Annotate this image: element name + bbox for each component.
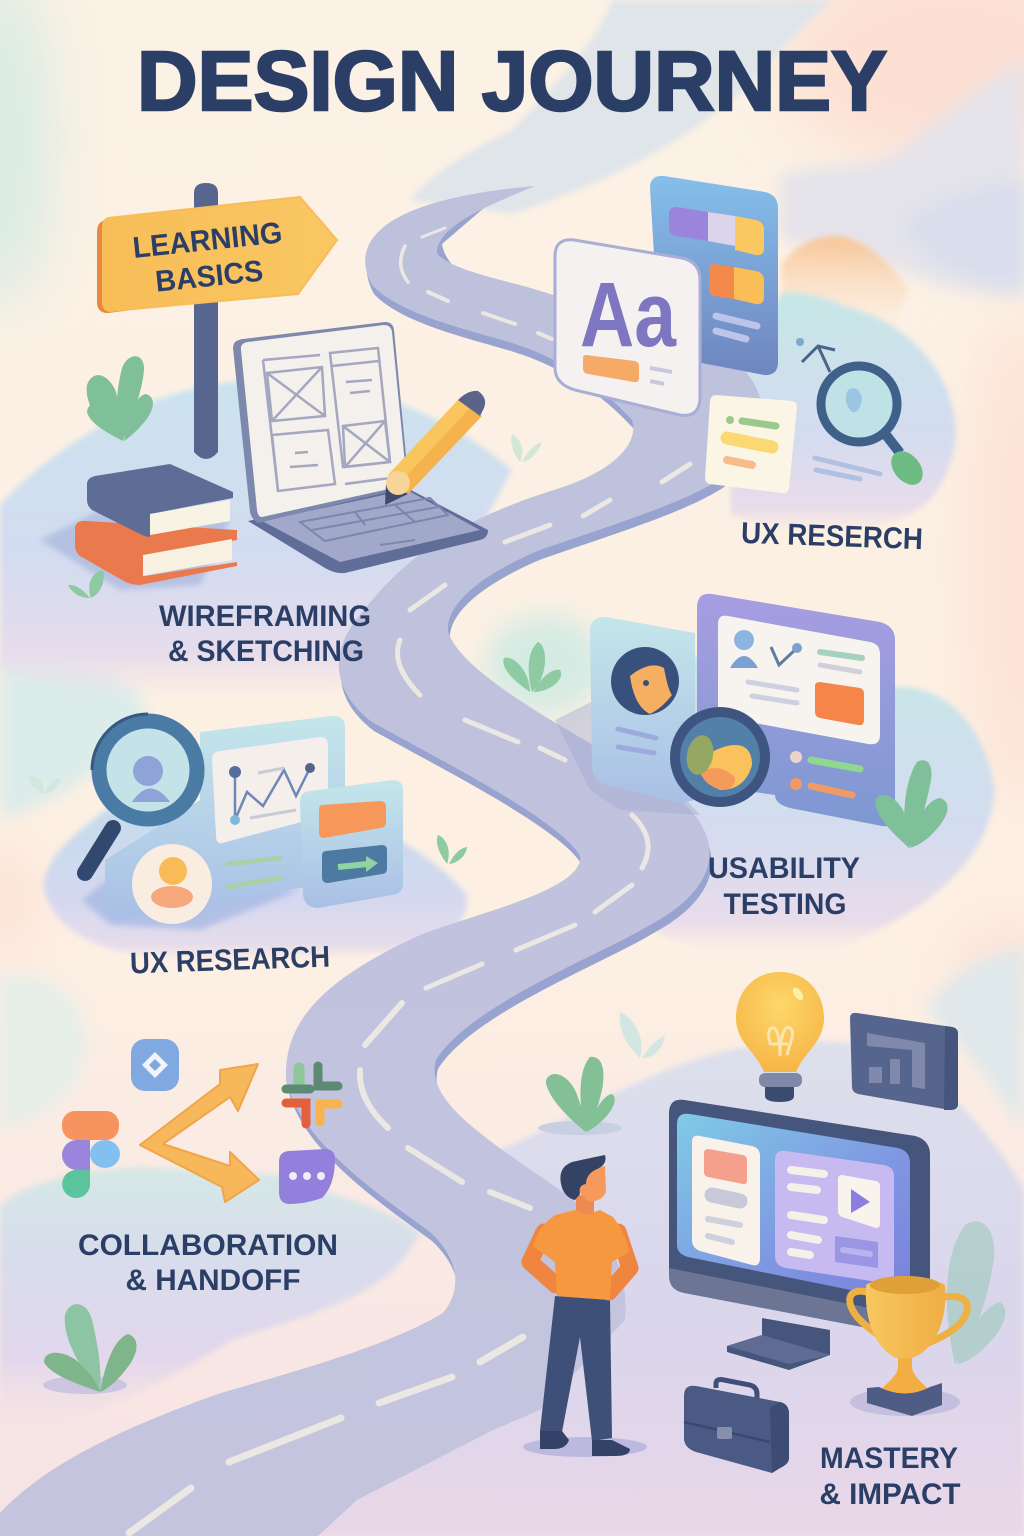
torso bbox=[533, 1210, 629, 1300]
persona avatar bbox=[611, 647, 679, 715]
sign label bbox=[131, 216, 288, 301]
UI card: typography bbox=[555, 240, 700, 415]
slack logo bbox=[286, 1066, 338, 1124]
ux research panels bbox=[82, 714, 403, 930]
label: collaboration and handoff bbox=[78, 1229, 338, 1297]
label: wireframing and sketching bbox=[159, 600, 371, 668]
label: mastery and impact: MASTERY bbox=[820, 1442, 958, 1475]
icon: faint sprout bbox=[620, 1012, 665, 1058]
icon: tiny sprout bbox=[68, 570, 104, 598]
hill: ux research bbox=[43, 800, 467, 961]
label: collaboration and handoff: & HANDOFF bbox=[126, 1264, 300, 1297]
shoes bbox=[540, 1431, 569, 1449]
label: collaboration and handoff: COLLABORATION bbox=[78, 1229, 338, 1262]
faint plant behind monitor bbox=[947, 1221, 1005, 1364]
label: usability testing bbox=[708, 852, 860, 921]
hill: bottom-left bbox=[0, 1167, 421, 1440]
frame bbox=[669, 1100, 930, 1340]
label: usability testing: USABILITY bbox=[708, 852, 860, 885]
diamond app icon bbox=[131, 1039, 179, 1091]
sign board edge bbox=[98, 198, 335, 312]
panel shadow bbox=[82, 880, 300, 930]
books shadow bbox=[40, 500, 230, 590]
label: mastery and impact bbox=[820, 1442, 960, 1511]
icon: magnifier bbox=[796, 338, 929, 491]
chart card bbox=[212, 737, 328, 843]
icon: plant by person bbox=[538, 1057, 622, 1135]
label: wireframing and sketching: & SKETCHING bbox=[168, 635, 364, 668]
neck and face bbox=[576, 1195, 594, 1215]
icon: plant right of usability bbox=[876, 760, 948, 848]
screen bbox=[677, 1114, 910, 1302]
signpost: learning basics bbox=[98, 183, 337, 459]
persona card bbox=[590, 617, 695, 803]
hair bbox=[560, 1155, 606, 1200]
label: ux reserch: UX RESERCH bbox=[740, 517, 924, 556]
ground shadow bbox=[523, 1437, 647, 1457]
status rows bbox=[790, 751, 802, 763]
left document bbox=[692, 1136, 760, 1265]
keyboard lines bbox=[300, 498, 448, 545]
road centre dashes bbox=[129, 228, 690, 1533]
icon: laptop with wireframe bbox=[233, 322, 488, 573]
hill: left teal mist bbox=[0, 655, 148, 820]
icon: trophy bbox=[850, 1276, 967, 1416]
hill: lower left teal mist bbox=[0, 974, 86, 1130]
sign label: BASICS bbox=[154, 255, 265, 299]
sign label: LEARNING bbox=[131, 216, 284, 265]
icon: analytics box bbox=[850, 1013, 958, 1110]
winding road bbox=[0, 186, 764, 1536]
icon: plant by sign bbox=[87, 356, 153, 441]
usability testing panels bbox=[555, 594, 895, 826]
monitor bbox=[669, 1100, 930, 1370]
corner mist top right of mastery bbox=[925, 945, 1024, 1130]
trophy cup bbox=[866, 1278, 945, 1358]
hill: research sun bbox=[782, 236, 909, 335]
laptop lid bbox=[233, 322, 409, 523]
icon: plant bottom left bbox=[43, 1304, 136, 1394]
share arrows bbox=[140, 1064, 259, 1202]
bottom orange book bbox=[75, 521, 237, 585]
icon: faint plant near road bbox=[511, 434, 542, 462]
pencil bbox=[388, 400, 482, 494]
collaboration icons bbox=[62, 1039, 338, 1204]
hill: bottom-right bbox=[300, 1041, 1024, 1536]
icon: briefcase bbox=[684, 1380, 789, 1473]
main window bbox=[697, 594, 895, 826]
icon: books bbox=[40, 464, 237, 590]
backing panel bbox=[105, 716, 345, 920]
title: DESIGN JOURNEY bbox=[137, 34, 887, 128]
magnifier bbox=[85, 714, 197, 873]
label: ux research: UX RESEARCH bbox=[130, 941, 331, 980]
UI card: sticky note bbox=[705, 395, 797, 493]
sky swoosh bbox=[410, 0, 832, 214]
trophy shadow bbox=[850, 1388, 960, 1416]
icon: plant near road bbox=[503, 642, 561, 692]
sign board bbox=[103, 197, 337, 311]
label: usability testing: TESTING bbox=[724, 888, 846, 921]
legs bbox=[540, 1296, 612, 1441]
sign pole bbox=[194, 183, 218, 459]
top navy book bbox=[87, 464, 233, 537]
avatar badge bbox=[132, 844, 212, 924]
window content bbox=[718, 616, 880, 744]
trophy handles bbox=[850, 1291, 967, 1344]
hill: usability bbox=[620, 650, 995, 952]
right sky band bbox=[779, 60, 1024, 300]
icon: sprout right of research bbox=[437, 835, 467, 864]
right document bbox=[775, 1151, 894, 1283]
label: wireframing and sketching: WIREFRAMING bbox=[159, 600, 371, 633]
wireframe layout bbox=[263, 348, 390, 491]
UI card: typography: Aa bbox=[580, 264, 677, 366]
stand bbox=[727, 1318, 830, 1370]
person bbox=[523, 1155, 647, 1457]
dashboard card bbox=[300, 780, 403, 908]
arms bbox=[530, 1232, 630, 1292]
icon: faint plant left bbox=[28, 776, 60, 794]
trophy plinth bbox=[867, 1383, 942, 1416]
hill: top-left bbox=[0, 380, 512, 702]
road surface bbox=[0, 186, 762, 1536]
chart circle bbox=[670, 707, 770, 807]
figma logo bbox=[62, 1111, 120, 1198]
laptop base bbox=[248, 488, 488, 573]
label: mastery and impact: & IMPACT bbox=[820, 1478, 960, 1511]
hill: top-right bbox=[730, 292, 956, 532]
hill: usability teal near plant bbox=[485, 615, 605, 715]
UI card: swatches bbox=[650, 176, 778, 375]
icon: lightbulb bbox=[736, 972, 824, 1102]
chat icon bbox=[279, 1149, 335, 1204]
road side shadow bbox=[289, 208, 726, 1275]
card shadow on road bbox=[555, 700, 700, 815]
